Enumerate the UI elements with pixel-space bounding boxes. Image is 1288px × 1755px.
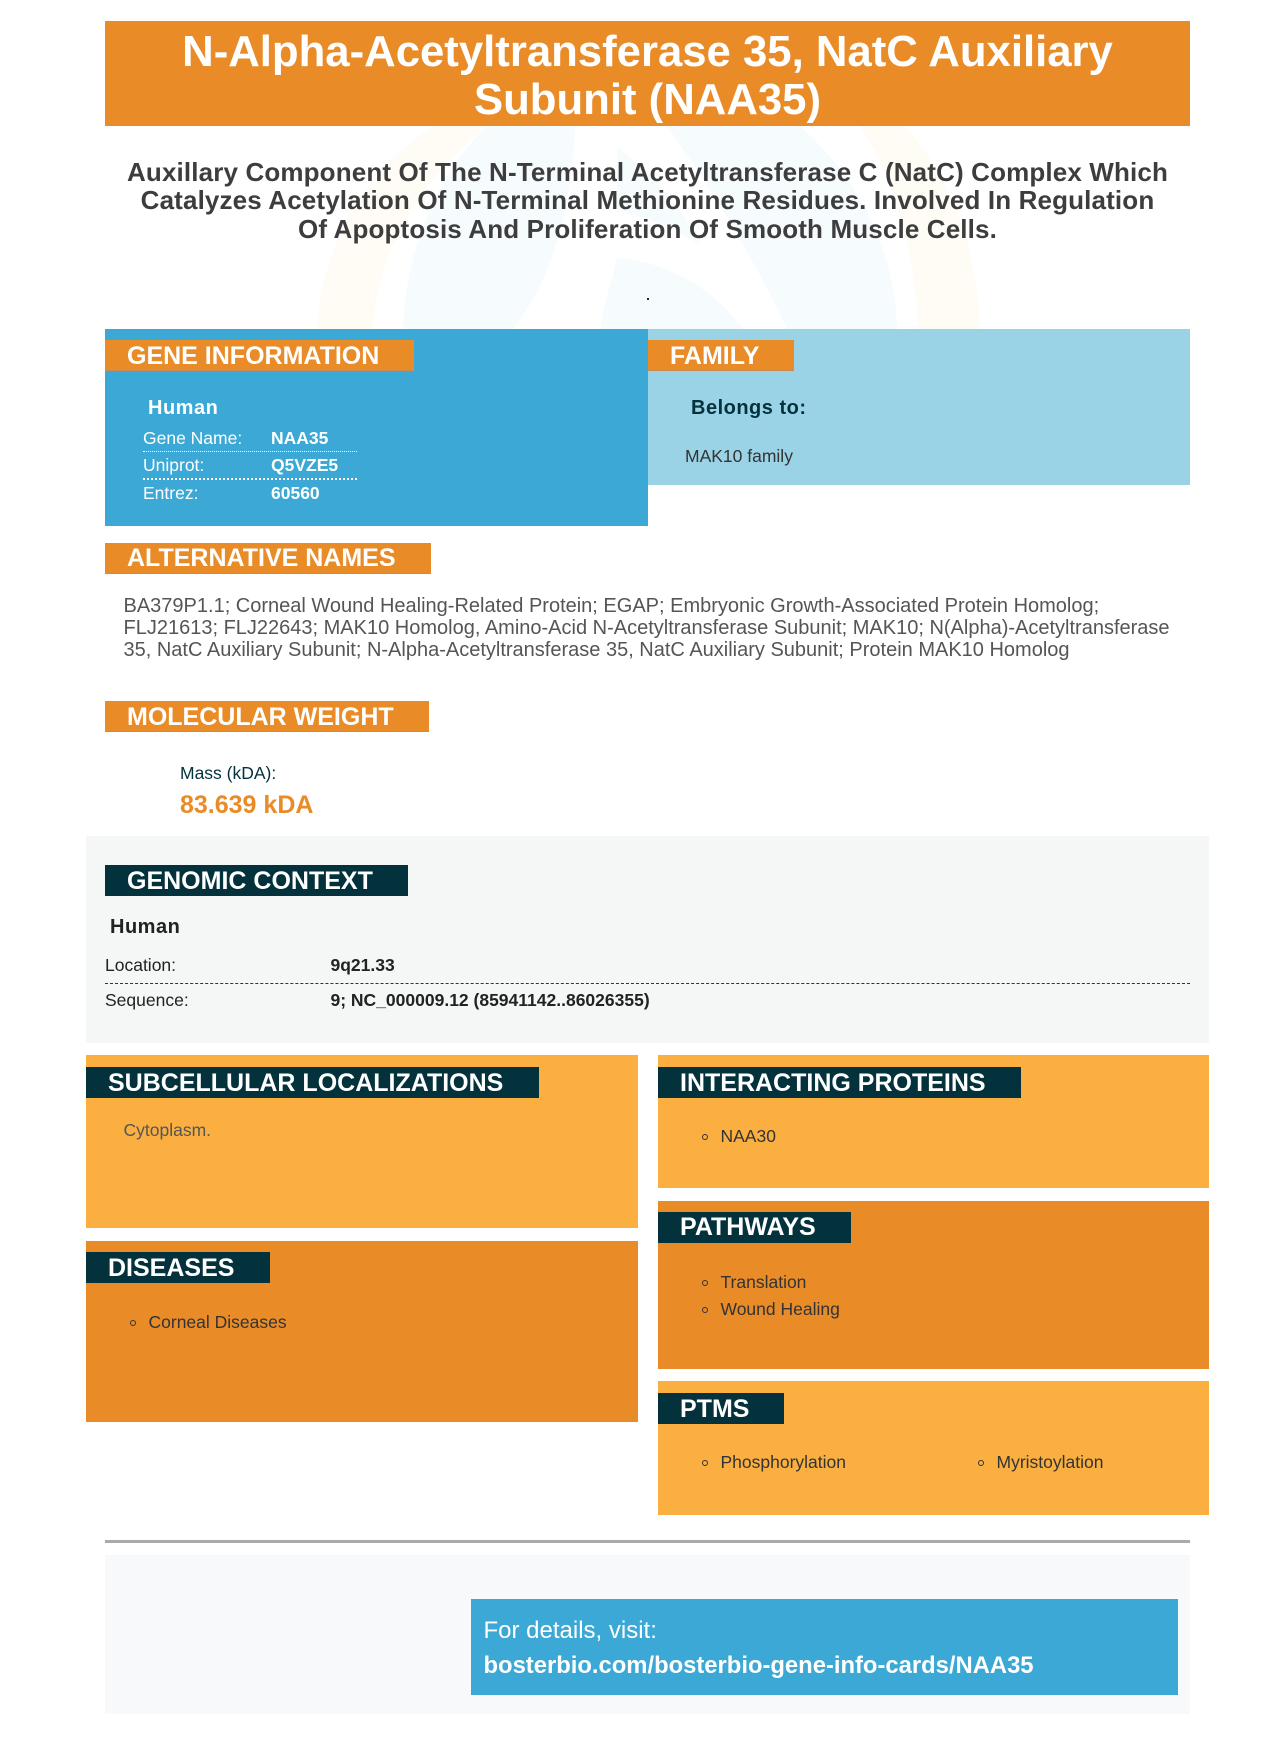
species label: Human: [148, 397, 218, 419]
subtitle: [127, 156, 1168, 244]
uniprot row: Q5VZE5: [271, 455, 338, 475]
location row: Location:: [105, 955, 176, 975]
panel: gene information: [105, 329, 648, 526]
panel: subcellular localizations: [86, 1055, 638, 1228]
heading: PTMS: [680, 1395, 749, 1423]
belongs to label: Belongs to:: [691, 397, 806, 419]
panel: genomic context: [86, 836, 1209, 1043]
entrez row: [143, 483, 320, 503]
heading: genomic context: GENOMIC CONTEXT: [127, 867, 373, 895]
title: [105, 21, 1190, 126]
gene name row: NAA35: [271, 428, 328, 448]
alternative names text: FLJ21613; FLJ22643; MAK10 Homolog, Amino-Acid N-Acetyltransferase Subunit; MAK10; N(Alpha)-Acetyltransferase: [124, 617, 1170, 639]
panel: footer: [105, 1555, 1190, 1714]
subtitle: Catalyzes Acetylation Of N-Terminal Methionine Residues. Involved In Regulation: [141, 185, 1154, 215]
sequence row: 9; NC_000009.12 (85941142..86026355): [330, 990, 650, 1010]
heading: PATHWAYS: [680, 1213, 816, 1241]
gene name row: Gene Name:: [143, 428, 242, 448]
heading: [658, 1393, 784, 1424]
uniprot row: [143, 453, 357, 480]
heading: family: FAMILY: [670, 342, 759, 370]
heading: DISEASES: [108, 1254, 234, 1282]
gene name row: [143, 426, 357, 452]
alternative names text: 35, NatC Auxiliary Subunit; N-Alpha-Acetyltransferase 35, NatC Auxiliary Subunit; Protein MAK10 Homolog: [124, 639, 1070, 661]
heading: family: [648, 340, 794, 371]
heading: molecular weight: MOLECULAR WEIGHT: [127, 703, 394, 731]
heading: [658, 1212, 851, 1243]
details url: bosterbio.com/bosterbio-gene-info-cards/NAA35: [484, 1652, 1034, 1679]
uniprot row: Uniprot:: [143, 455, 204, 475]
panel: diseases: [86, 1241, 638, 1422]
localization text: Cytoplasm.: [124, 1120, 211, 1140]
title: N-Alpha-Acetyltransferase 35, NatC Auxiliary: [182, 27, 1113, 76]
entrez row: 60560: [271, 483, 320, 503]
panel: family: [648, 329, 1190, 485]
subtitle: Auxillary Component Of The N-Terminal Acetyltransferase C (NatC) Complex Which: [127, 156, 1168, 186]
sequence row: Sequence:: [105, 990, 189, 1010]
panel: ptms: [658, 1381, 1209, 1515]
location row: 9q21.33: [330, 955, 395, 975]
background watermark: [317, 126, 980, 329]
location row: [105, 953, 1190, 984]
pathway item: Wound Healing: [720, 1299, 840, 1319]
heading: gene information: GENE INFORMATION: [127, 342, 379, 370]
species label: Human: [110, 916, 180, 938]
details label: For details, visit:: [484, 1617, 657, 1644]
heading: alternative names: ALTERNATIVE NAMES: [127, 544, 396, 572]
protein item: NAA30: [720, 1126, 776, 1146]
panel: pathways: [658, 1201, 1209, 1369]
heading: [86, 1252, 270, 1283]
subtitle: Of Apoptosis And Proliferation Of Smooth Muscle Cells.: [298, 214, 997, 244]
dot mark: [647, 298, 649, 300]
heading: INTERACTING PROTEINS: [680, 1069, 986, 1097]
panel: interacting proteins: [658, 1055, 1209, 1188]
disease item: Corneal Diseases: [148, 1312, 287, 1332]
mass label: Mass (kDA):: [180, 763, 276, 783]
ptm item: Myristoylation: [996, 1452, 1103, 1472]
title: Subunit (NAA35): [474, 74, 821, 124]
alternative names text: BA379P1.1; Corneal Wound Healing-Related Protein; EGAP; Embryonic Growth-Associated Protein Homolog;: [124, 595, 1099, 617]
family value: MAK10 family: [685, 446, 793, 466]
heading: SUBCELLULAR LOCALIZATIONS: [108, 1069, 503, 1097]
ptm item: Phosphorylation: [720, 1452, 846, 1472]
callout: details link: [471, 1599, 1178, 1695]
pathway item: Translation: [720, 1272, 806, 1292]
alternative names text: [124, 595, 1170, 661]
mass value: 83.639 kDA: [180, 791, 313, 819]
sequence row: [105, 990, 650, 1010]
entrez row: Entrez:: [143, 483, 198, 503]
